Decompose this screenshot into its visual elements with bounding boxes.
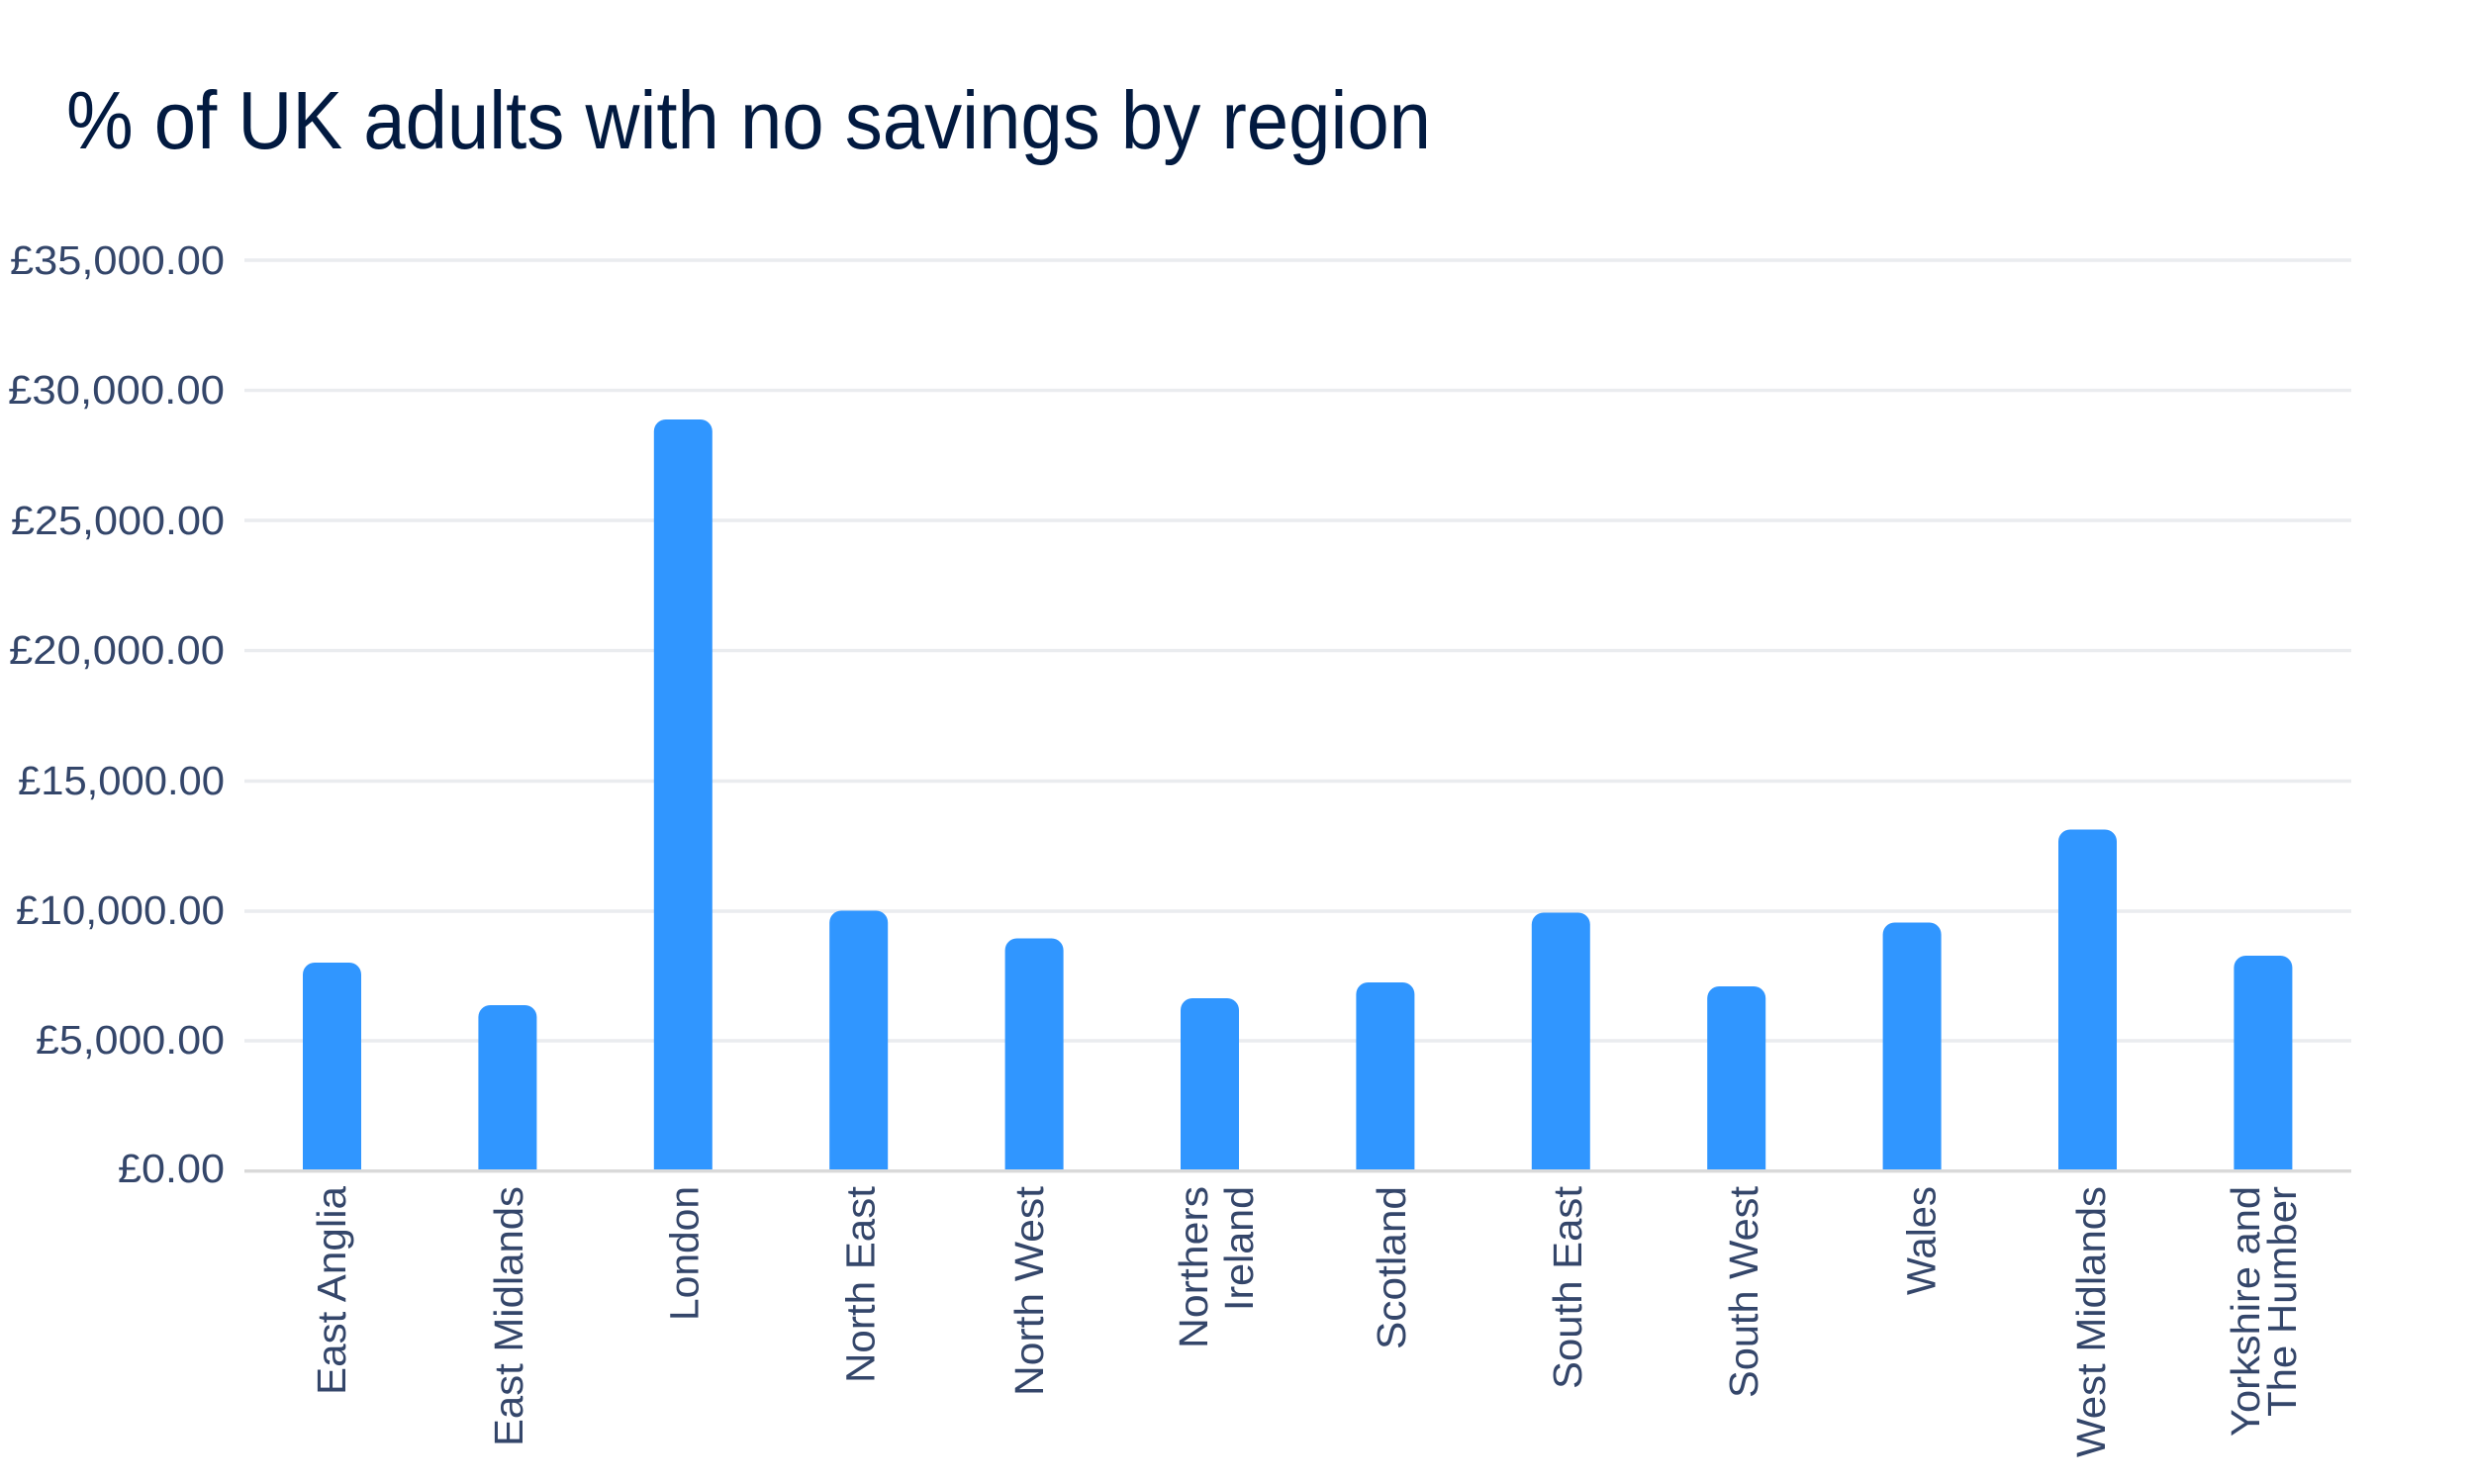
bars <box>303 419 2292 1169</box>
x axis category labels: Wales <box>1898 1186 1944 1295</box>
bar: South East <box>1532 912 1590 1169</box>
bar: London <box>654 419 713 1169</box>
x axis category labels: London <box>661 1186 707 1321</box>
title: % of UK adults with no savings by region <box>66 74 1431 166</box>
bar: South West <box>1707 986 1765 1169</box>
x axis category labels: West Midlands <box>2068 1186 2114 1457</box>
bar: Wales <box>1883 922 1942 1169</box>
y axis labels: £35,000.00 <box>10 237 225 283</box>
bar: Scotland <box>1356 982 1414 1169</box>
x axis category labels: East Midlands <box>486 1186 531 1446</box>
bar chart <box>8 237 2351 1457</box>
x axis category labels: The Humber <box>2259 1186 2305 1417</box>
x axis category labels: Scotland <box>1369 1186 1414 1349</box>
x axis category labels: East Anglia <box>309 1186 354 1395</box>
bar: Yorkshire and The Humber <box>2234 956 2292 1169</box>
y axis labels: £0.00 <box>118 1146 225 1191</box>
x axis category labels: Northers <box>1171 1186 1216 1348</box>
x axis category labels: North East <box>837 1185 883 1383</box>
y axis labels: £30,000.00 <box>8 367 225 413</box>
x axis category labels <box>309 1185 2305 1457</box>
x axis category labels: South East <box>1545 1185 1590 1389</box>
x axis line <box>244 1169 2351 1172</box>
bar: North West <box>1005 938 1064 1169</box>
bar: East Anglia <box>303 963 361 1169</box>
x axis category labels: Ireland <box>1216 1186 1262 1311</box>
bar: West Midlands <box>2058 829 2117 1169</box>
y axis labels <box>8 237 225 1191</box>
x axis category labels: South West <box>1721 1185 1766 1398</box>
y axis labels: £10,000.00 <box>16 887 225 933</box>
x axis category labels: Yorkshire and <box>2223 1186 2268 1437</box>
x axis category labels: North West <box>1006 1185 1052 1396</box>
y axis labels: £5,000.00 <box>36 1017 225 1063</box>
y axis labels: £20,000.00 <box>9 627 225 673</box>
bar: Northers Ireland <box>1181 998 1239 1169</box>
y axis labels: £15,000.00 <box>18 758 225 803</box>
bar: North East <box>829 910 888 1169</box>
bar: East Midlands <box>478 1005 536 1169</box>
y axis labels: £25,000.00 <box>11 498 225 543</box>
